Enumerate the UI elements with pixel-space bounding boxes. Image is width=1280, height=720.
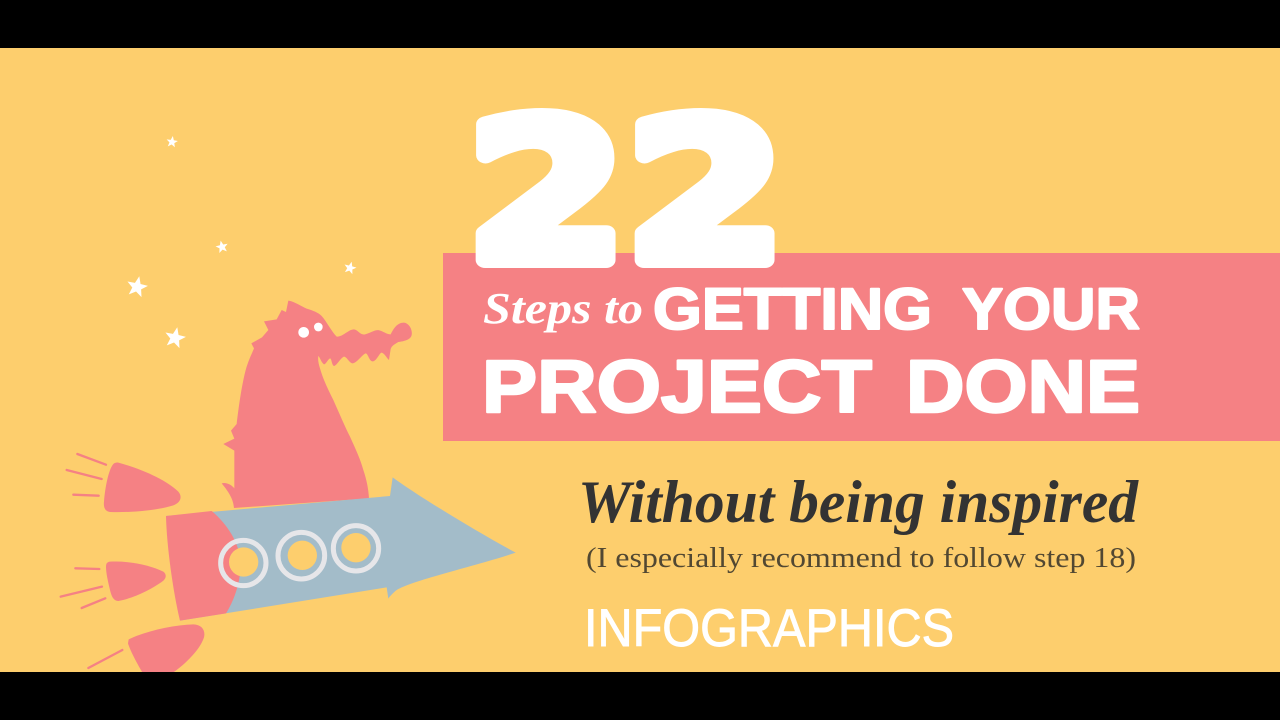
exhaust speed lines [61,454,122,668]
rocket [166,477,516,621]
note: step 18 recommendation: (I especially recommend to follow step 18) [586,542,1136,574]
stars [125,135,358,349]
heading: getting your [653,277,1140,342]
illustration: crocodile riding rocket [61,301,516,677]
pink title banner [443,253,1280,441]
heading: getting your: GETTING [653,277,932,342]
heading: project done [482,345,1140,428]
label: infographics: INFOGRAPHICS [584,599,954,658]
top letterbox bar [0,0,1280,48]
crocodile eyes [298,323,323,338]
heading: steps to: Steps to [483,284,643,333]
crocodile [222,301,412,508]
heading: getting your: YOUR [962,277,1140,342]
porthole rings [221,526,379,586]
heading: project done: DONE [906,345,1140,428]
bottom letterbox bar [0,672,1280,720]
rocket body [166,477,516,621]
heading number 22: 22 [467,80,785,306]
rocket tail section [166,511,241,621]
heading: project done: PROJECT [482,345,872,428]
subtitle: without being inspired: Without being inspired [578,469,1139,535]
porthole windows [229,533,371,577]
exhaust flames [104,463,204,677]
